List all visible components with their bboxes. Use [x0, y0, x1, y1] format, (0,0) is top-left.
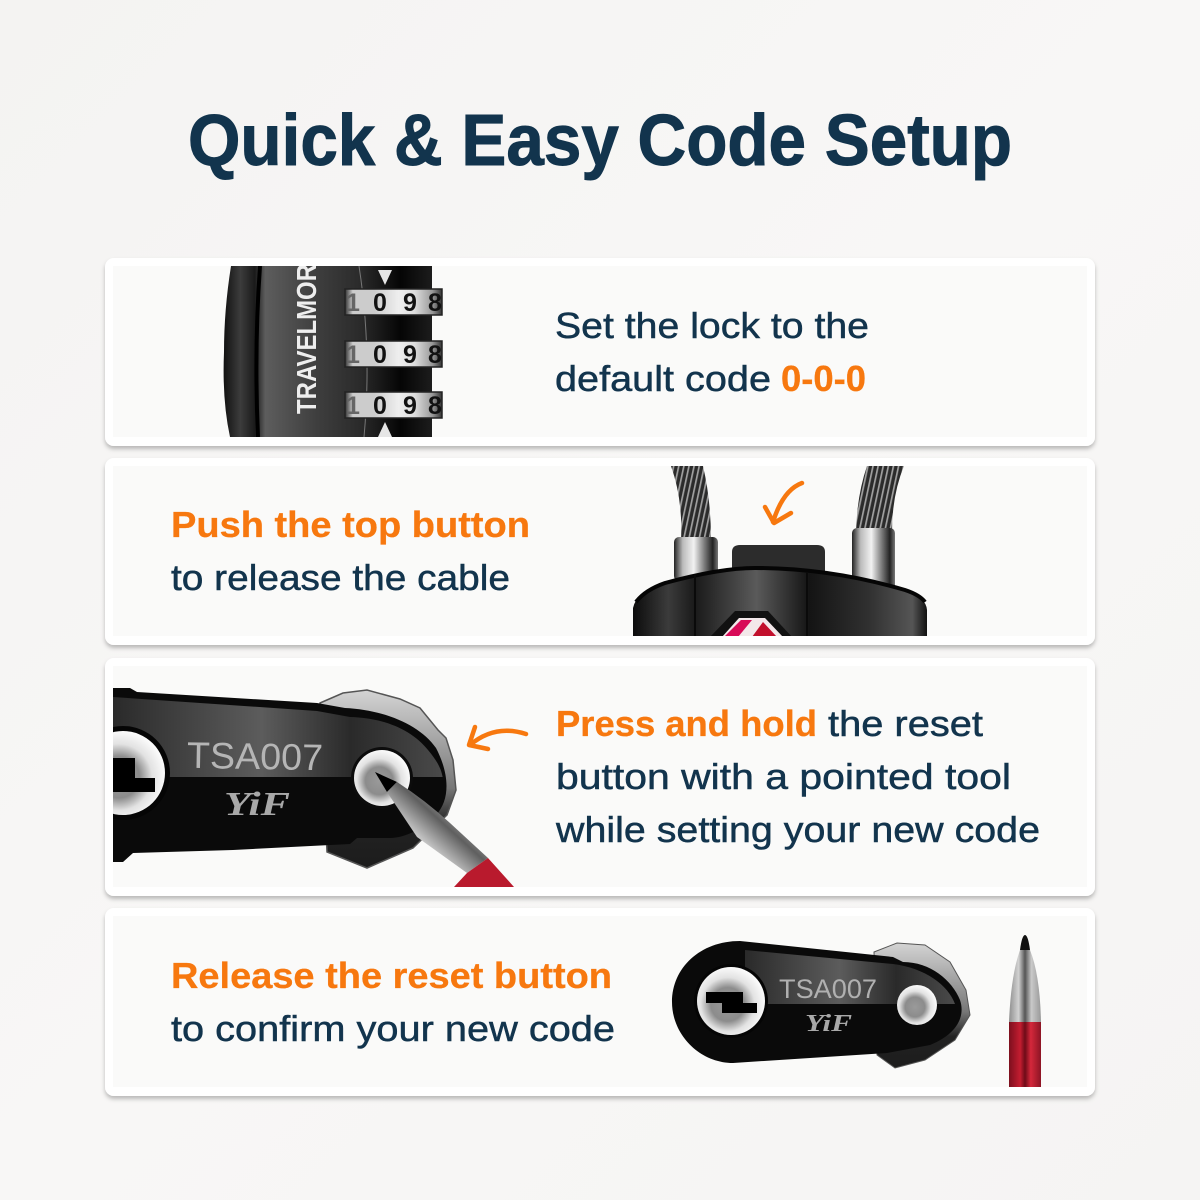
panel: step 3 press and hold [76, 658, 1095, 896]
text: step 4 [171, 955, 615, 1049]
arrow: pointing to top button [765, 483, 802, 523]
icon: lock combination dials: 9 [403, 289, 417, 317]
icon: lock combination dials: 0 [373, 341, 387, 369]
text: step 2: to release the cable [171, 557, 510, 598]
icon: lock combination dials: 1 [346, 341, 360, 369]
icon: lock back with pen in reset button: YiF [224, 786, 290, 823]
text: step 1: Set the lock to the [555, 305, 869, 346]
panel: step 2 push top button [105, 458, 1095, 645]
icon: lock top with cable [633, 466, 927, 637]
icon: lock back: TSA007 [779, 974, 877, 1004]
icon: lock combination dials [224, 264, 442, 437]
icon: lock combination dials: 9 [403, 392, 417, 420]
icon: lock combination dials: 8 [428, 392, 442, 420]
icon: lock back with pen in reset button: TSA007 [187, 735, 323, 778]
text: step 2 [171, 504, 530, 598]
icon: lock back: YiF [805, 1011, 852, 1037]
arrow: pointing to reset button [469, 727, 526, 749]
text: step 4: Release the reset button [171, 955, 612, 996]
text: step 4: to confirm your new code [171, 1008, 615, 1049]
icon: lock back with pen in reset button [76, 688, 514, 887]
text: step 1: default code [555, 358, 771, 399]
icon: lock back [672, 941, 970, 1068]
icon: lock combination dials: 8 [428, 289, 442, 317]
text: step 3: while setting your new code [555, 809, 1040, 850]
text: step 3: Press and hold [556, 703, 817, 744]
title: Quick & Easy Code Setup [188, 101, 1012, 181]
panel: step 4 release reset button [105, 908, 1095, 1096]
icon: lock combination dials: 1 [346, 289, 360, 317]
icon: lock combination dials: TRAVELMOR [291, 264, 322, 414]
text: step 2: Push the top button [171, 504, 530, 545]
icon: lock combination dials: 0 [373, 392, 387, 420]
text: step 1: 0-0-0 [781, 358, 866, 399]
icon: lock combination dials: 0 [373, 289, 387, 317]
text: step 3 [555, 703, 1040, 850]
icon: pen [1009, 935, 1041, 1087]
text: step 3: the reset [828, 703, 983, 744]
icon: lock combination dials: 9 [403, 341, 417, 369]
icon: lock combination dials: 8 [428, 341, 442, 369]
panel: step 1 set default code [105, 258, 1095, 446]
text: step 1 [555, 305, 869, 399]
icon: lock combination dials: 1 [346, 392, 360, 420]
text: step 3: button with a pointed tool [556, 756, 1011, 797]
